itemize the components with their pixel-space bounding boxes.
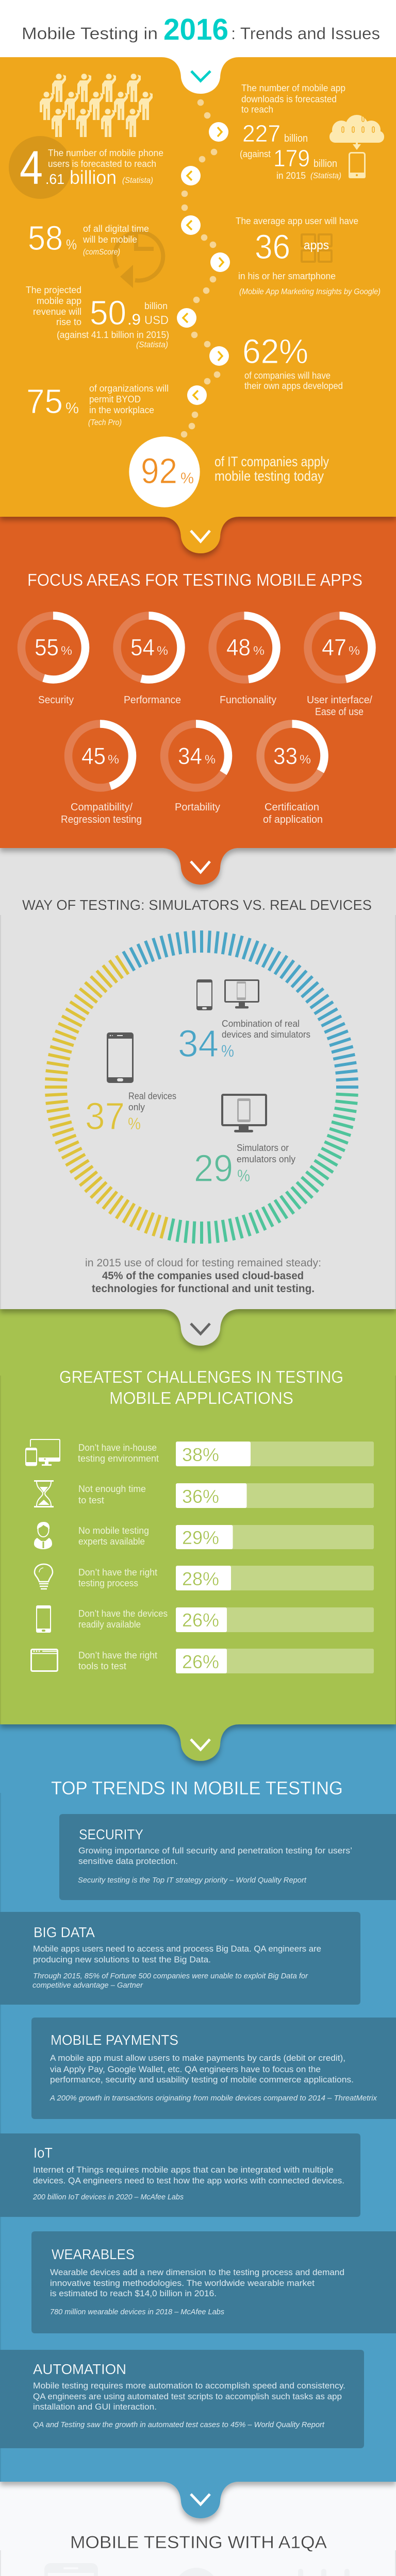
icon: hourglass <box>34 1480 54 1507</box>
donut chart: security 55%: % <box>61 644 72 658</box>
panel: automation: QA and Testing saw the growth in automated test cases to 45% – World Quality Report <box>33 2420 325 2429</box>
stat: 36 apps <box>236 215 381 296</box>
panel: security <box>59 1814 396 1900</box>
stat: real devices 37%: 37 <box>85 1095 125 1138</box>
stat: app downloads 227 billion: billion <box>314 158 337 170</box>
icon: phone <box>36 1605 51 1633</box>
panel: wearables: is estimated to reach $14,0 billion in 2016. <box>50 2289 217 2298</box>
panel: security: SECURITY <box>79 1826 143 1842</box>
bar row: not enough time 36%: 36% <box>182 1486 219 1507</box>
stat: app downloads 227 billion: billion <box>284 133 308 144</box>
bar row: in-house testing environment 38%: testing environment <box>78 1453 159 1464</box>
icon: background phone <box>44 2563 98 2576</box>
panel: wearables: innovative testing methodologies. The worldwide wearable market <box>50 2278 315 2288</box>
section background: focus areas (orange) <box>0 517 396 885</box>
stat: mobile phone users 4.61 billion: (Statista) <box>122 176 153 185</box>
donut chart: certification 33%: 33 <box>273 743 298 769</box>
icon: expert person <box>34 1522 52 1549</box>
stat: combination 34%: % <box>221 1042 234 1060</box>
bar row: in-house testing environment 38%: 38% <box>182 1444 219 1465</box>
icon: background calendar <box>280 2569 367 2576</box>
bar row: not enough time 36% <box>78 1483 374 1508</box>
bar row: in-house testing environment 38%: Don’t have in-house <box>78 1443 157 1453</box>
donut chart: portability 34% <box>164 724 228 813</box>
stat: real devices 37% <box>85 1091 176 1138</box>
text block: cloud testing note: 45% of the companies used cloud-based <box>102 1270 304 1282</box>
stat: 75% BYOD: (Tech Pro) <box>88 418 122 427</box>
title <box>22 13 380 46</box>
donut chart: portability 34%: % <box>205 753 216 767</box>
panel: automation <box>0 2350 364 2448</box>
panel: automation: QA engineers are using automated test scripts to accomplish such tasks as app <box>33 2392 342 2401</box>
callout: 92% mobile testing today: 92 <box>141 451 177 491</box>
panel: mobile payments: MOBILE PAYMENTS <box>51 2032 178 2048</box>
stat: 75% BYOD: permit BYOD <box>89 394 141 404</box>
stat: combination 34%: Combination of real <box>222 1019 300 1029</box>
stat: 75% BYOD: 75 <box>26 382 63 421</box>
stat: 58% digital time <box>28 219 149 258</box>
arrow: chevron to focus areas <box>191 531 210 541</box>
panel: big data <box>0 1912 360 2005</box>
donut chart: functionality 48%: 48 <box>226 634 251 660</box>
bar row: no mobile testing experts 29%: No mobile testing <box>78 1526 149 1536</box>
donut chart: compatibility 45%: Regression testing <box>61 814 142 825</box>
stat: 36 apps: The average app user will have <box>236 215 358 226</box>
icon: clock <box>114 232 163 288</box>
stat: 58% digital time: (comScore) <box>83 248 120 257</box>
icon: light bulb <box>35 1564 53 1589</box>
panel: IoT: devices. QA engineers need to test how the app works with connected devices. <box>33 2176 344 2185</box>
donut chart: performance 54%: 54 <box>130 634 155 660</box>
stat: 75% BYOD: % <box>65 400 79 417</box>
bar row: right tools to test 26% <box>78 1649 374 1673</box>
stat: real devices 37%: % <box>128 1114 141 1133</box>
icon: crowd of people on phones <box>40 74 153 137</box>
donut chart: security 55% <box>22 616 86 706</box>
text block: cloud testing note: in 2015 use of cloud for testing remained steady: <box>85 1257 321 1269</box>
donut chart: portability 34%: Portability <box>175 802 220 813</box>
callout: 92% mobile testing today: mobile testing today <box>214 468 324 484</box>
text block: cloud testing note: technologies for functional and unit testing. <box>92 1283 315 1295</box>
donut chart: certification 33%: % <box>300 753 311 767</box>
arrow: chevron to trends <box>191 1739 210 1750</box>
panel: wearables <box>31 2231 396 2333</box>
stat: 62% own apps <box>242 332 343 391</box>
stat: 75% BYOD: in the workplace <box>89 404 154 415</box>
stat: simulators 29% <box>194 1143 295 1190</box>
panel: wearables: 780 million wearable devices in 2018 – McAfee Labs <box>50 2308 224 2316</box>
arrow: chevron to statistics <box>191 71 210 81</box>
panel: mobile payments <box>31 2018 396 2119</box>
stat: app downloads 227 billion: in 2015 <box>276 170 306 181</box>
bar row: not enough time 36%: Not enough time <box>78 1484 146 1494</box>
panel: mobile payments: performance, security and usability testing of mobile commerce applications. <box>50 2075 354 2084</box>
donut chart: compatibility 45%: 45 <box>81 743 106 769</box>
panel: big data: Through 2015, 85% of Fortune 500 companies were unable to exploit Big Data for <box>33 1972 308 1980</box>
page background: A1QA section <box>0 2482 396 2576</box>
donut chart: user interface 47%: 47 <box>322 634 346 660</box>
stat: app downloads 227 billion <box>240 82 345 181</box>
heading: top trends: TOP TRENDS IN MOBILE TESTING <box>51 1777 343 1799</box>
header background <box>0 0 396 94</box>
stat: combination 34%: devices and simulators <box>222 1029 310 1040</box>
panel: mobile payments: A 200% growth in transactions originating from mobile devices compared to 2014 – ThreatMetrix <box>50 2094 377 2103</box>
donut chart: user interface 47% <box>307 616 372 718</box>
panel: big data: competitive advantage – Gartner <box>32 1981 143 1990</box>
panel: big data: BIG DATA <box>34 1924 95 1940</box>
stat: simulators 29%: emulators only <box>237 1154 295 1164</box>
donut chart: performance 54%: % <box>157 644 168 658</box>
stat: app revenue 50.9 billion USD: billion <box>144 300 168 311</box>
stat: 58% digital time: will be mobile <box>82 234 137 245</box>
panel: security: sensitive data protection. <box>78 1856 178 1866</box>
donut chart: functionality 48% <box>212 616 276 706</box>
stat: app downloads 227 billion: The number of mobile app <box>241 82 345 93</box>
stat: 36 apps: 36 <box>255 228 290 266</box>
stat: 58% digital time: 58 <box>28 219 63 258</box>
stat: app revenue 50.9 billion USD: rise to <box>56 316 81 327</box>
stat: app revenue 50.9 billion USD <box>26 284 169 349</box>
stat: simulators 29%: % <box>237 1166 250 1185</box>
stat: 58% digital time: of all digital time <box>83 223 149 234</box>
bar row: right tools to test 26%: tools to test <box>78 1661 126 1671</box>
icon: simulator monitor <box>221 1094 267 1132</box>
panel: wearables: Wearable devices add a new dimension to the testing process and demand <box>50 2267 344 2277</box>
heading: greatest challenges <box>59 1367 343 1408</box>
panel: automation: installation and GUI interaction. <box>33 2402 157 2412</box>
stat: app downloads 227 billion: 227 <box>242 120 280 147</box>
callout: 92% mobile testing today: of IT companies apply <box>214 454 329 469</box>
panel: security: Security testing is the Top IT strategy priority – World Quality Report <box>78 1876 307 1885</box>
arrow: chevron to A1QA section <box>191 2494 210 2504</box>
stat: 36 apps: in his or her smartphone <box>238 270 336 281</box>
stat: 75% BYOD <box>26 382 169 427</box>
bar row: no mobile testing experts 29%: 29% <box>182 1527 219 1548</box>
stat: 36 apps: (Mobile App Marketing Insights by Google) <box>239 287 381 296</box>
icon: real device phone <box>107 1032 134 1083</box>
donut chart: performance 54%: Performance <box>124 694 181 706</box>
bar row: right testing process 28%: testing process <box>78 1578 138 1588</box>
donut chart: portability 34%: 34 <box>178 743 202 769</box>
icon: phone and monitor combination <box>196 979 259 1010</box>
arrow: chevron to way of testing <box>191 861 210 872</box>
stat: real devices 37%: Real devices <box>128 1091 176 1101</box>
donut chart: performance 54% <box>117 616 181 706</box>
bar row: no mobile testing experts 29% <box>78 1525 374 1549</box>
donut chart: certification 33%: Certification <box>265 802 319 813</box>
stat: 58% digital time: % <box>66 236 77 252</box>
stat: 36 apps: apps <box>304 239 329 252</box>
stat: app downloads 227 billion: downloads is forecasted <box>241 94 337 104</box>
donut chart: compatibility 45%: % <box>108 753 119 767</box>
stat: mobile phone users 4.61 billion: The number of mobile phone <box>48 147 163 158</box>
stat: app revenue 50.9 billion USD: mobile app <box>37 295 81 306</box>
panel: big data: Mobile apps users need to access and process Big Data. QA engineers are <box>33 1944 321 1954</box>
section background: statistics (yellow) <box>0 57 396 553</box>
panel: IoT: Internet of Things requires mobile apps that can be integrated with multiple <box>33 2165 334 2175</box>
panel: IoT: IoT <box>34 2145 53 2161</box>
stat: simulators 29%: 29 <box>194 1147 233 1190</box>
bar row: right tools to test 26%: 26% <box>182 1651 219 1672</box>
donut chart: user interface 47%: % <box>349 644 360 658</box>
panel: IoT <box>0 2133 360 2217</box>
stat: app revenue 50.9 billion USD: (against 41.1 billion in 2015) <box>57 329 169 340</box>
bar row: in-house testing environment 38% <box>78 1442 374 1466</box>
bar row: right tools to test 26%: Don’t have the right <box>78 1650 157 1660</box>
radial tick chart <box>45 930 358 1244</box>
bar row: devices readily available 26%: readily available <box>78 1619 141 1630</box>
stat: mobile phone users 4.61 billion: .61 <box>45 171 64 187</box>
stat: app downloads 227 billion: 179 <box>273 145 310 172</box>
stat: 75% BYOD: of organizations will <box>89 383 169 394</box>
stat: app revenue 50.9 billion USD: .9 <box>127 311 141 328</box>
arrow: chevron to challenges <box>191 1324 210 1334</box>
panel: big data: producing new solutions to test the Big Data. <box>33 1955 211 1964</box>
bar row: right testing process 28%: Don’t have the right <box>78 1567 157 1578</box>
callout: 92% mobile testing today: % <box>180 470 194 487</box>
stat: 62% own apps: of companies will have <box>244 370 331 381</box>
bar row: devices readily available 26%: 26% <box>182 1609 219 1631</box>
title: 2016 <box>163 13 228 46</box>
panel: mobile payments: via Apply Pay, Google Wallet, etc. QA engineers have to focus on the <box>50 2064 321 2074</box>
bar row: right testing process 28% <box>78 1566 374 1590</box>
donut chart: certification 33% <box>260 724 324 825</box>
icon: monitor and phone <box>26 1439 60 1466</box>
heading: greatest challenges: GREATEST CHALLENGES IN TESTING <box>59 1367 343 1386</box>
stat: mobile phone users 4.61 billion: 4 <box>20 142 43 194</box>
stat: mobile phone users 4.61 billion <box>9 136 163 199</box>
stat: simulators 29%: Simulators or <box>237 1143 289 1153</box>
donut chart: security 55%: 55 <box>35 634 59 660</box>
stat: combination 34%: 34 <box>178 1022 219 1065</box>
panel: automation: Mobile testing requires more automation to accomplish speed and consistency. <box>33 2381 345 2391</box>
donut chart: functionality 48%: Functionality <box>220 694 276 706</box>
donut chart: user interface 47%: Ease of use <box>315 706 364 718</box>
stat: app revenue 50.9 billion USD: 50 <box>90 294 126 332</box>
panel: mobile payments: A mobile app must allow users to make payments by cards (debit or credit), <box>50 2053 345 2063</box>
stat: app revenue 50.9 billion USD: USD <box>144 313 169 327</box>
stat: app revenue 50.9 billion USD: The projected <box>26 284 81 295</box>
icon: browser window <box>31 1650 58 1671</box>
stat: 62% own apps: 62% <box>242 332 308 371</box>
panel: security: Growing importance of full security and penetration testing for users’ <box>78 1845 352 1856</box>
stat: mobile phone users 4.61 billion: users is forecasted to reach <box>48 158 156 169</box>
stat: combination 34% <box>178 1019 310 1065</box>
bar row: devices readily available 26%: Don’t have the devices <box>78 1608 168 1619</box>
text block: cloud testing note <box>85 1257 321 1295</box>
donut chart: compatibility 45% <box>61 724 142 825</box>
heading: greatest challenges: MOBILE APPLICATIONS <box>109 1388 293 1408</box>
stat: 62% own apps: their own apps developed <box>244 380 343 391</box>
title: : Trends and Issues <box>231 24 380 43</box>
panel: automation: AUTOMATION <box>33 2361 126 2377</box>
heading: focus areas: FOCUS AREAS FOR TESTING MOBILE APPS <box>27 570 362 589</box>
heading: way of testing: WAY OF TESTING: SIMULATORS VS. REAL DEVICES <box>22 897 372 913</box>
donut chart: functionality 48%: % <box>253 644 265 658</box>
bar row: no mobile testing experts 29%: experts available <box>78 1536 145 1547</box>
stat: mobile phone users 4.61 billion: billion <box>70 167 117 188</box>
panel: IoT: 200 billion IoT devices in 2020 – McAfee Labs <box>32 2193 184 2201</box>
panel: wearables: WEARABLES <box>52 2246 135 2262</box>
donut chart: security 55%: Security <box>38 694 74 706</box>
bar row: devices readily available 26% <box>78 1607 374 1632</box>
stat: app revenue 50.9 billion USD: revenue will <box>33 306 81 317</box>
donut chart: compatibility 45%: Compatibility/ <box>71 802 133 813</box>
section background: top trends (blue) <box>0 1724 396 2518</box>
stat: app downloads 227 billion: (Statista) <box>310 172 341 180</box>
stat: app downloads 227 billion: (against <box>240 148 271 159</box>
section background: way of testing (grey) <box>0 848 396 1346</box>
stat: real devices 37%: only <box>128 1102 145 1112</box>
callout: 92% mobile testing today <box>129 436 329 507</box>
section background: challenges (green) <box>0 1309 396 1761</box>
stat: app downloads 227 billion: to reach <box>241 104 273 114</box>
donut chart: user interface 47%: User interface/ <box>307 694 372 706</box>
bar row: not enough time 36%: to test <box>78 1495 104 1505</box>
stat: app revenue 50.9 billion USD: (Statista) <box>136 341 168 349</box>
donut chart: certification 33%: of application <box>263 814 323 825</box>
title: Mobile Testing in <box>22 24 158 43</box>
icon: cloud download to phone <box>329 115 384 178</box>
dotted path with chevron bubbles <box>177 99 230 437</box>
bar row: right testing process 28%: 28% <box>182 1568 219 1589</box>
icon: background engineer <box>156 2568 238 2576</box>
heading: mobile testing with A1QA: MOBILE TESTING WITH A1QA <box>70 2533 327 2552</box>
